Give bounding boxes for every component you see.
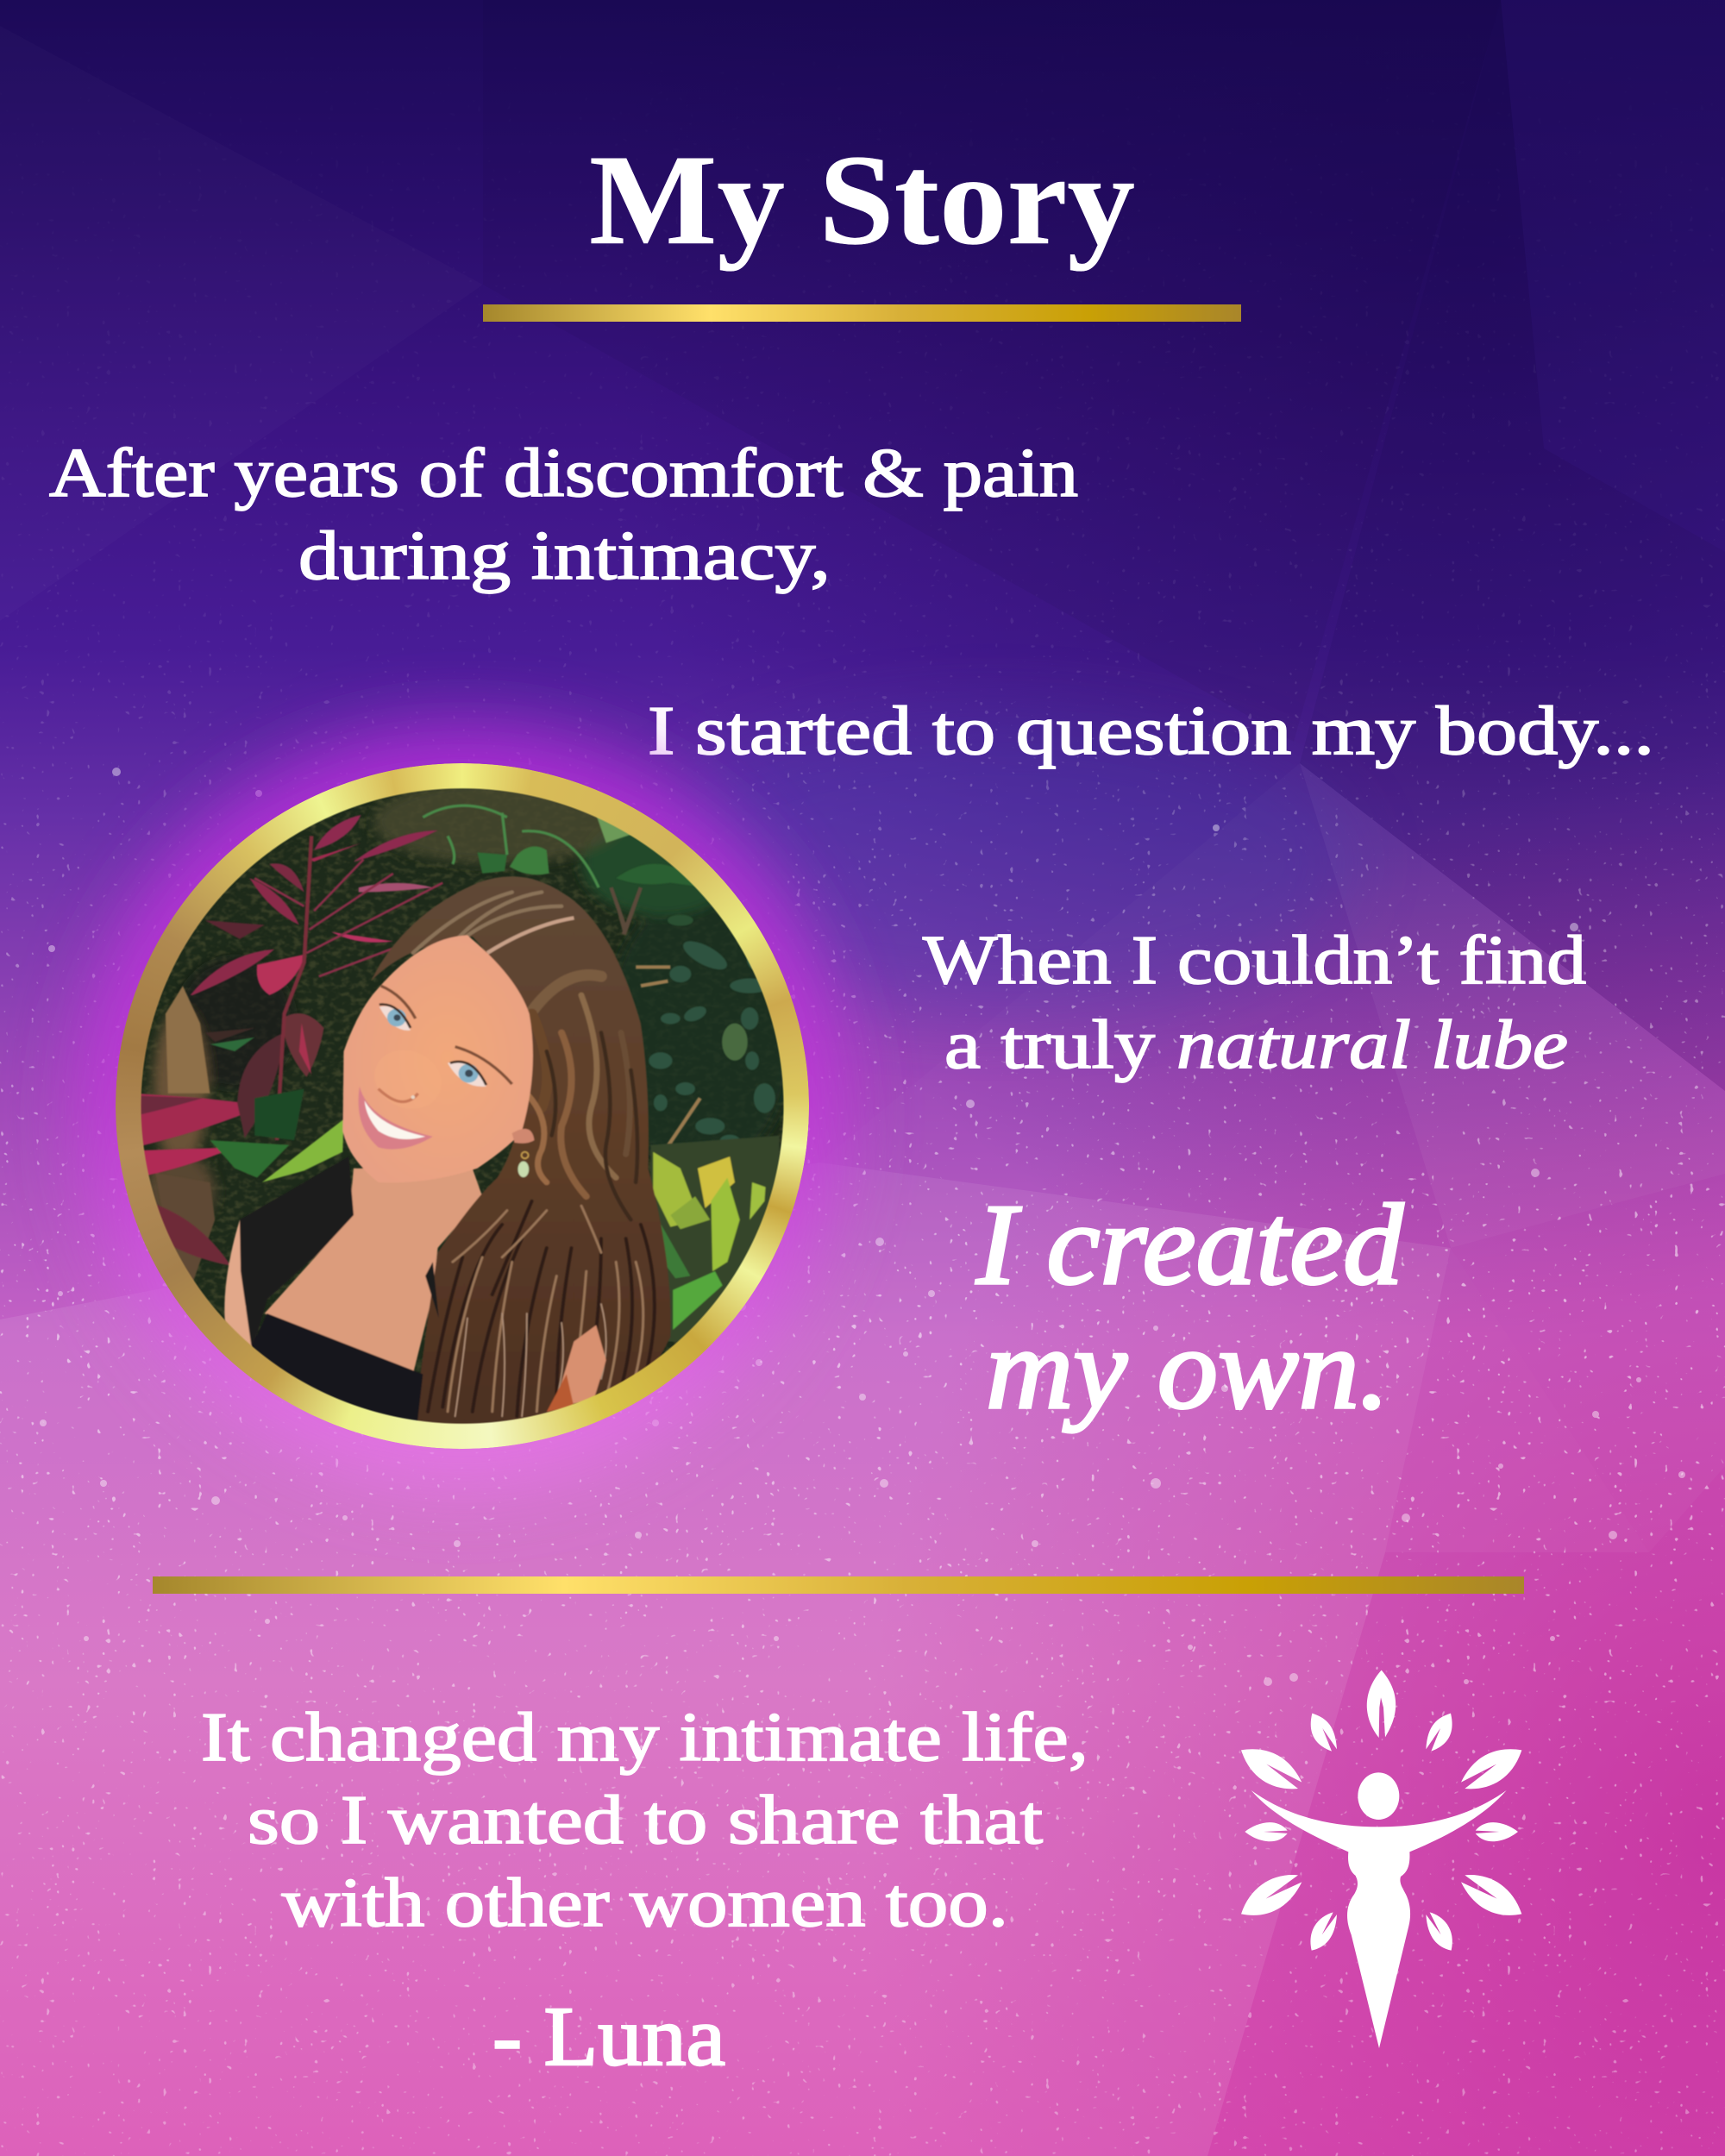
right eye [448,1062,486,1087]
yellow-green foliage [652,1151,693,1228]
black top [240,1156,354,1351]
earring [518,1152,529,1177]
eyebrows [381,986,512,1084]
trunk left [166,986,210,1094]
portrait photo [140,788,785,1425]
text: natural lube [923,923,1586,1083]
text: discomfort intro: After years of discomfort & pain [49,436,1078,511]
text: closing quote: so I wanted to share that [248,1783,1043,1858]
text: closing quote: It changed my intimate life, [201,1700,1088,1776]
divider [153,1576,1524,1594]
text: closing quote [201,1700,1088,1941]
hair [371,876,671,1431]
gold ring [116,763,809,1449]
text: natural lube: When I couldn’t find [923,923,1586,999]
text: I created my own [975,1181,1404,1432]
neck and chest [265,1169,482,1374]
signature: - Luna [492,1990,725,2084]
nose [379,1088,418,1102]
leaves left and top [1241,1670,1396,1951]
leaves right [1426,1714,1521,1951]
left eye [380,1005,411,1031]
left arm [223,1219,253,1347]
banana leaves [210,1140,289,1178]
text: discomfort intro [49,436,1078,594]
glow behind portrait [78,727,846,1486]
title underline [483,304,1241,322]
face [342,935,533,1182]
dark right foliage [649,915,775,1146]
body [1251,1790,1507,2048]
mouth [359,1087,433,1150]
text: I created my own: I created [975,1181,1404,1308]
right arm [561,1325,607,1404]
head [1358,1772,1399,1820]
logo: goddess with leaves [1241,1670,1521,2048]
title: My Story [589,128,1135,272]
red leaves [140,1094,241,1146]
text: closing quote: with other women too. [282,1865,1008,1941]
text: natural lube: natural lube [1176,1007,1568,1083]
text: question my body: I started to question my body... [648,693,1654,769]
text: I created my own: my own. [986,1305,1389,1432]
text: discomfort intro: during intimacy, [298,518,831,594]
lower right ground [650,1136,780,1342]
text: natural lube: a truly [944,1007,1155,1083]
